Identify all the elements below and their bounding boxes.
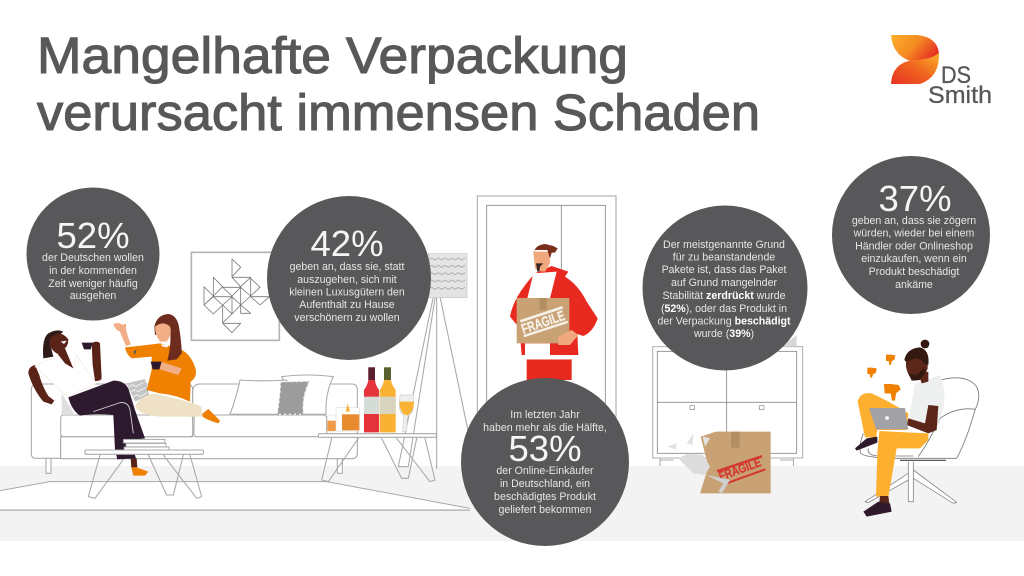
thumbs-down icons: [867, 355, 901, 401]
coffee table and books: [85, 439, 203, 454]
delivery man with fragile box: [510, 244, 598, 380]
sofa: [31, 384, 357, 473]
stat circle: 37%: [832, 156, 990, 314]
text circle: main reason for complaints: (52%), oder das Produkt in: [661, 303, 787, 315]
stat circle: 52%: der Deutschen wollen: [42, 252, 144, 264]
stat circle: 52%: ausgehen: [70, 290, 116, 302]
stat circle: 53%: [461, 378, 629, 546]
text circle: main reason for complaints: für zu beanstandende: [673, 252, 775, 264]
text circle: main reason for complaints: [642, 206, 808, 370]
DS Smith logo: DS: [941, 62, 971, 89]
stat circle: 37%: Produkt beschädigt: [869, 266, 959, 278]
living room scene: [0, 252, 470, 511]
stat circle: 52%: Zeit weniger häufig: [48, 278, 138, 290]
text circle: main reason for complaints: der Verpackung beschädigt: [657, 316, 791, 328]
title: Mangelhafte Verpackung: [37, 27, 628, 84]
man with laptop: [855, 340, 944, 517]
stat circle: 53%: in Deutschland, ein: [500, 478, 590, 490]
patterned cushion: [62, 379, 149, 415]
stat circle: 37%: Händler oder Onlineshop: [855, 240, 973, 252]
stat circle: 37%: geben an, dass sie zögern: [852, 215, 976, 227]
door frame: [477, 196, 616, 506]
stat circle: 53%: haben mehr als die Hälfte,: [483, 422, 607, 434]
stat circle: 37%: würden, wieder bei einem: [853, 228, 975, 240]
damaged fragile box: FRAGILE: [717, 455, 763, 483]
text circle: main reason for complaints: Stabilität zerdrückt wurde: [662, 290, 786, 302]
stat circle: 37%: einzukaufen, wenn ein: [861, 253, 967, 265]
stat circle: 52%: 52%: [56, 215, 130, 256]
stat circle: 42%: auszugehen, sich mit: [297, 274, 397, 286]
sideboard: [653, 335, 803, 466]
title: [37, 27, 760, 141]
low table legs: [88, 455, 202, 498]
floor lamp: [398, 254, 470, 468]
stat circle: 53%: der Online-Einkäufer: [496, 465, 594, 477]
floor band: [0, 466, 1024, 541]
delivery man with fragile box: FRAGILE: [519, 307, 567, 337]
wine bottles: [364, 367, 396, 432]
stat circle: 52%: in der kommenden: [49, 265, 137, 277]
stat circle: 42%: 42%: [310, 223, 384, 264]
stat circle: 42%: kleinen Luxusgütern den: [289, 286, 405, 298]
stat circle: 53%: Im letzten Jahr: [510, 409, 580, 421]
stat circle: 53%: geliefert bekommen: [498, 504, 592, 516]
framed wall picture: [191, 252, 279, 340]
stat circle: 37%: ankäme: [895, 279, 933, 291]
stat circle: 42%: geben an, dass sie, statt: [290, 261, 404, 273]
text circle: main reason for complaints: wurde (39%): [693, 328, 754, 340]
people on the sofa: [28, 314, 220, 476]
person: laughing woman with cup: [28, 330, 148, 476]
stat circle: 53%: 53%: [508, 428, 582, 469]
wine glass: [399, 395, 414, 432]
stat circle: 42%: [267, 196, 431, 360]
damaged fragile box: [667, 432, 771, 493]
stat circle: 42%: Aufenthalt zu Hause: [299, 299, 395, 311]
rug: [0, 482, 470, 511]
title: verursacht immensen Schaden: [37, 84, 760, 141]
candles: [327, 403, 359, 431]
sideboard scene: [653, 335, 803, 493]
stat circle: 37%: 37%: [878, 178, 952, 219]
side table: [318, 434, 436, 482]
stat circle: 53%: beschädigtes Produkt: [494, 491, 596, 503]
doorway scene: [477, 196, 616, 506]
armchair: [860, 378, 979, 503]
DS Smith logo: [891, 35, 992, 109]
stat circle: 52%: [26, 188, 160, 320]
person on chair with laptop: [855, 340, 979, 517]
sofa cushions: [230, 375, 333, 414]
DS Smith logo: Smith: [928, 82, 992, 109]
person: woman with orange sweater: [113, 314, 220, 423]
text circle: main reason for complaints: Pakete ist, dass das Paket: [662, 264, 786, 276]
text circle: main reason for complaints: auf Grund mangelnder: [671, 277, 777, 289]
text circle: main reason for complaints: Der meistgenannte Grund: [663, 239, 785, 251]
stat circle: 42%: verschönern zu wollen: [294, 312, 400, 324]
